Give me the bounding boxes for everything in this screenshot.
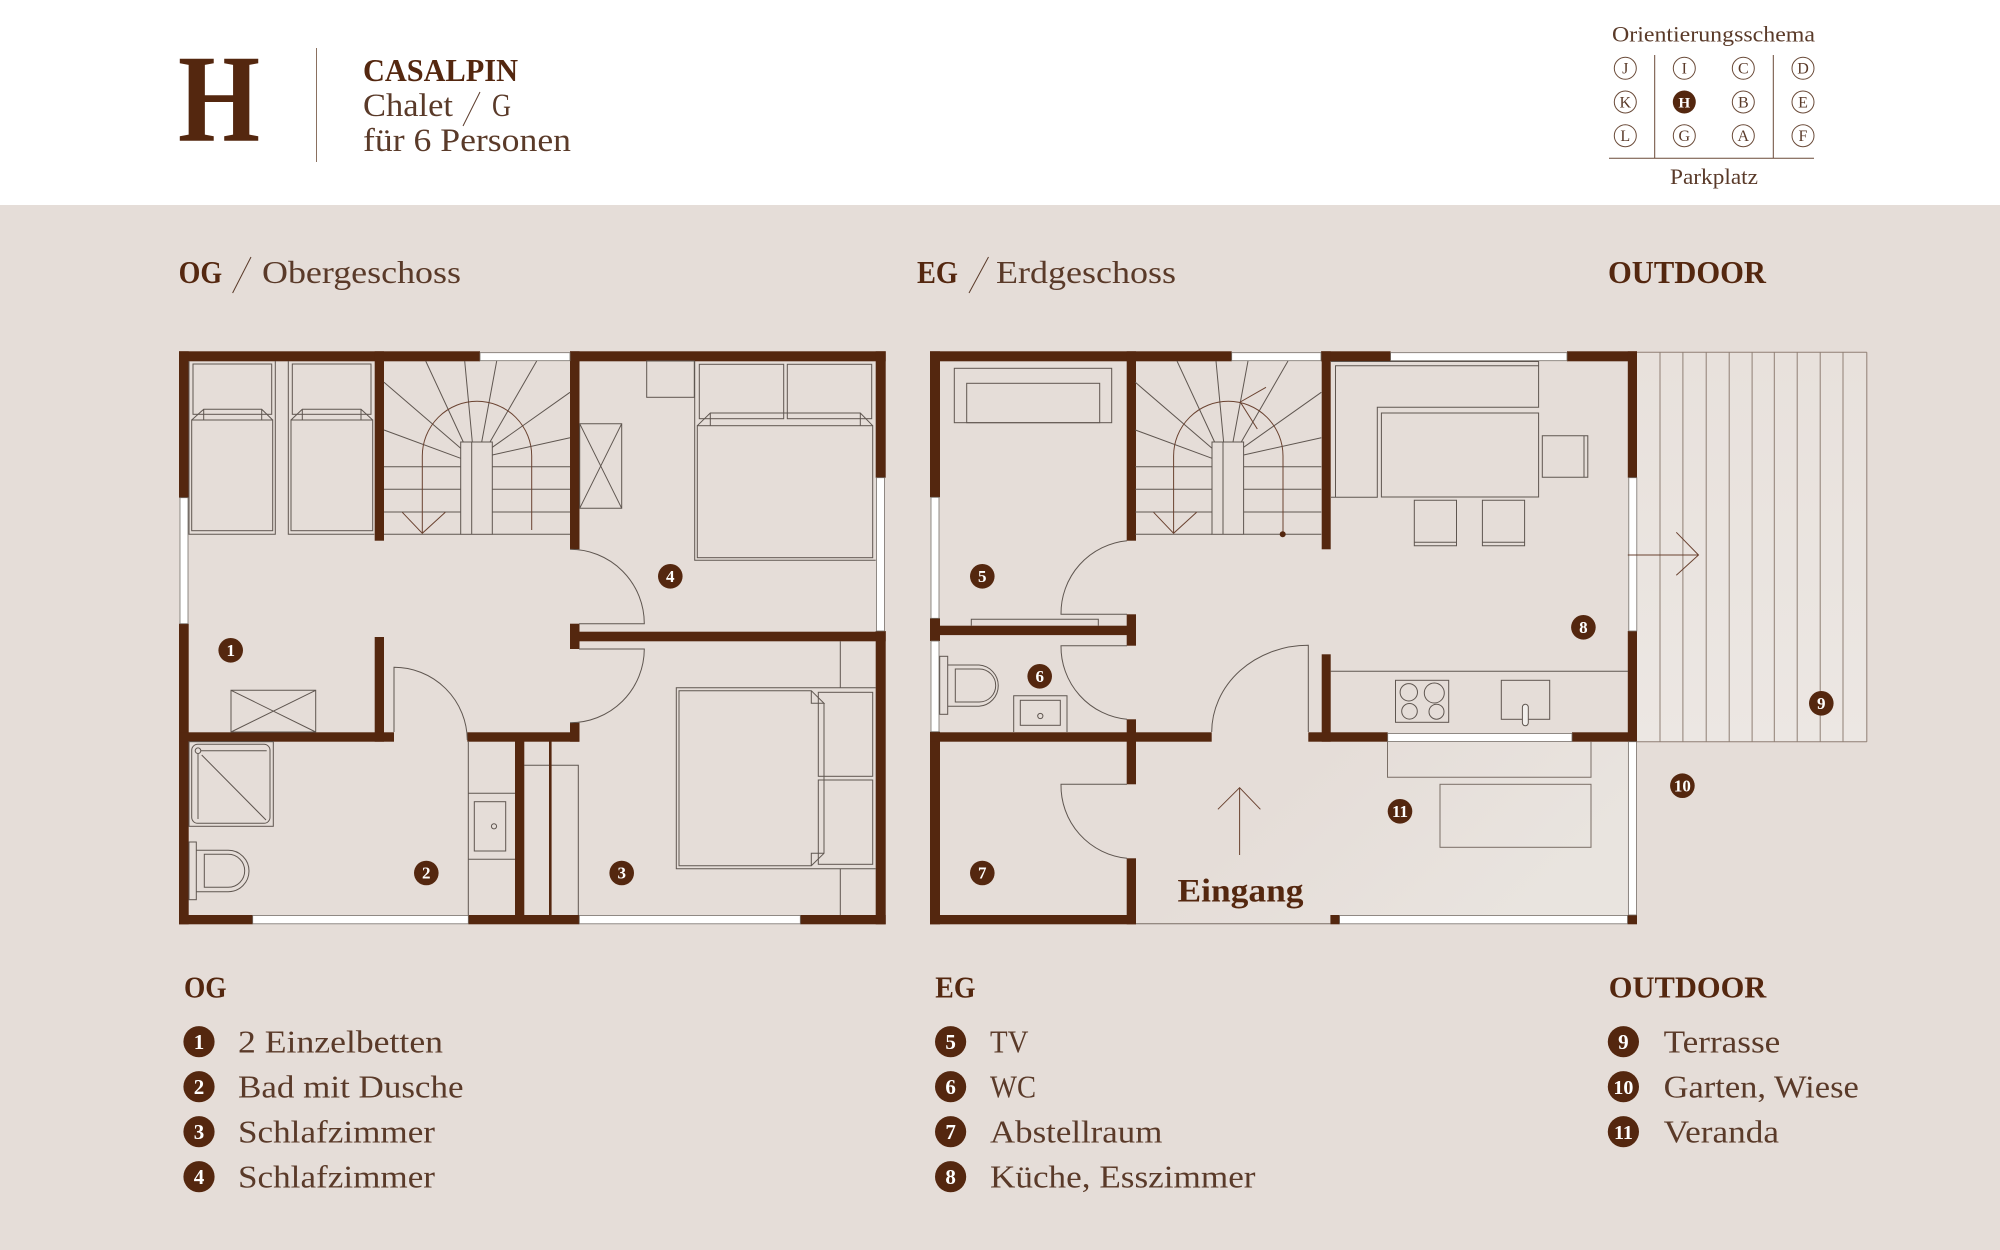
orientation schema: Parkplatz — [1670, 164, 1758, 189]
legend: OUTDOOR: 9 — [1618, 1030, 1629, 1054]
legend: OG: Schlafzimmer — [238, 1114, 435, 1150]
legend: OUTDOOR — [1608, 970, 1859, 1150]
orientation schema: D — [1797, 61, 1809, 78]
windows — [180, 353, 884, 924]
legend: EG: EG — [935, 970, 976, 1005]
legend: EG: Abstellraum — [990, 1114, 1162, 1150]
vanity — [1014, 696, 1067, 732]
floor plan: upper floor OG — [179, 351, 886, 924]
shower — [189, 742, 273, 826]
orientation schema: I — [1682, 61, 1687, 78]
doors — [394, 549, 644, 740]
orientation schema — [1609, 22, 1815, 189]
legend: OG — [183, 970, 464, 1195]
kitchen counter, stove and sink — [1331, 671, 1628, 726]
room number badges on plan: 4 — [666, 567, 675, 586]
terrace — [1637, 352, 1867, 742]
toilet — [189, 842, 249, 900]
closet — [524, 741, 578, 915]
toilet — [940, 656, 998, 714]
orientation schema: F — [1799, 128, 1808, 145]
chalet title: G — [492, 88, 511, 124]
heading: OUTDOOR: OUTDOOR — [1608, 254, 1767, 290]
header band — [0, 0, 2000, 205]
wardrobes — [231, 424, 622, 732]
legend: OG: OG — [184, 970, 227, 1005]
orientation schema: G — [1679, 128, 1691, 145]
orientation schema: Orientierungsschema — [1612, 22, 1815, 47]
orientation schema: B — [1738, 94, 1749, 111]
doors — [1061, 541, 1308, 858]
room number badges on plan: 3 — [617, 864, 626, 883]
legend: OUTDOOR: Terrasse — [1664, 1024, 1780, 1060]
chalet title: Chalet — [363, 88, 453, 124]
legend: OG: 1 — [194, 1030, 204, 1054]
legend: EG: 7 — [945, 1120, 956, 1144]
room number badges on plan: 2 — [422, 864, 431, 883]
orientation schema: A — [1738, 128, 1750, 145]
legend: EG: Küche, Esszimmer — [990, 1159, 1256, 1195]
floor plan: ground floor EG — [930, 351, 1698, 924]
dining bench, table and chairs — [1331, 362, 1588, 546]
walls — [930, 351, 1637, 924]
arrow to terrace — [1628, 532, 1698, 575]
walls — [179, 351, 886, 924]
room number badges on plan: 7 — [978, 864, 987, 883]
orientation schema: H — [1678, 95, 1690, 111]
heading: EG Erdgeschoss: Erdgeschoss — [996, 254, 1176, 290]
staircase — [384, 361, 570, 534]
legend: EG: TV — [990, 1024, 1028, 1060]
legend: EG: 8 — [945, 1165, 956, 1189]
chalet title: CASALPIN — [363, 52, 518, 88]
legend: EG: WC — [990, 1069, 1036, 1105]
heading: OG Obergeschoss: Obergeschoss — [262, 254, 461, 290]
orientation schema: E — [1798, 94, 1808, 111]
room number badges on plan: 10 — [1674, 776, 1691, 795]
tv unit — [954, 368, 1112, 626]
legend: OG: 3 — [194, 1120, 204, 1144]
house letter H: H — [178, 31, 260, 169]
orientation schema: L — [1620, 128, 1630, 145]
legend: OUTDOOR: Veranda — [1664, 1114, 1779, 1150]
orientation schema: K — [1620, 94, 1632, 111]
legend: OUTDOOR: Garten, Wiese — [1664, 1069, 1859, 1105]
legend: OUTDOOR: 10 — [1613, 1077, 1633, 1099]
chalet title: für 6 Personen — [363, 123, 571, 159]
room number badges on plan — [218, 564, 1834, 885]
entrance arrow — [1218, 788, 1260, 855]
room number badges on plan: 9 — [1817, 694, 1826, 713]
chalet title — [363, 52, 571, 159]
room number badges on plan: 1 — [226, 641, 235, 660]
entrance label: Eingang — [1178, 874, 1304, 910]
room number badges on plan: 6 — [1035, 667, 1044, 686]
vanity — [468, 741, 515, 915]
legend: OG: Schlafzimmer — [238, 1159, 435, 1195]
orientation schema: J — [1622, 61, 1628, 78]
heading: OG Obergeschoss — [179, 254, 461, 293]
bedroom 3 bed — [676, 641, 876, 915]
legend: OG: 2 Einzelbetten — [238, 1024, 443, 1060]
orientation schema: C — [1738, 61, 1749, 78]
veranda surface — [1136, 742, 1628, 924]
windows — [931, 353, 1637, 924]
room number badges on plan: 11 — [1392, 802, 1408, 821]
room number badges on plan: 5 — [978, 567, 987, 586]
legend: EG: 6 — [945, 1075, 956, 1099]
staircase — [1135, 361, 1321, 537]
heading: EG Erdgeschoss — [917, 254, 1176, 293]
heading: EG Erdgeschoss: EG — [917, 254, 958, 290]
legend: OUTDOOR: 11 — [1614, 1122, 1633, 1144]
veranda furniture — [1388, 742, 1591, 847]
single beds — [189, 361, 374, 534]
heading: OG Obergeschoss: OG — [179, 254, 222, 290]
room number badges on plan: 8 — [1579, 618, 1588, 637]
legend: EG: 5 — [945, 1030, 956, 1054]
legend: OG: Bad mit Dusche — [238, 1069, 464, 1105]
legend: OG: 2 — [194, 1075, 204, 1099]
bedroom 4 bed — [647, 361, 876, 560]
legend: OUTDOOR: OUTDOOR — [1609, 970, 1767, 1005]
legend: OG: 4 — [194, 1165, 205, 1189]
legend: EG — [935, 970, 1256, 1195]
